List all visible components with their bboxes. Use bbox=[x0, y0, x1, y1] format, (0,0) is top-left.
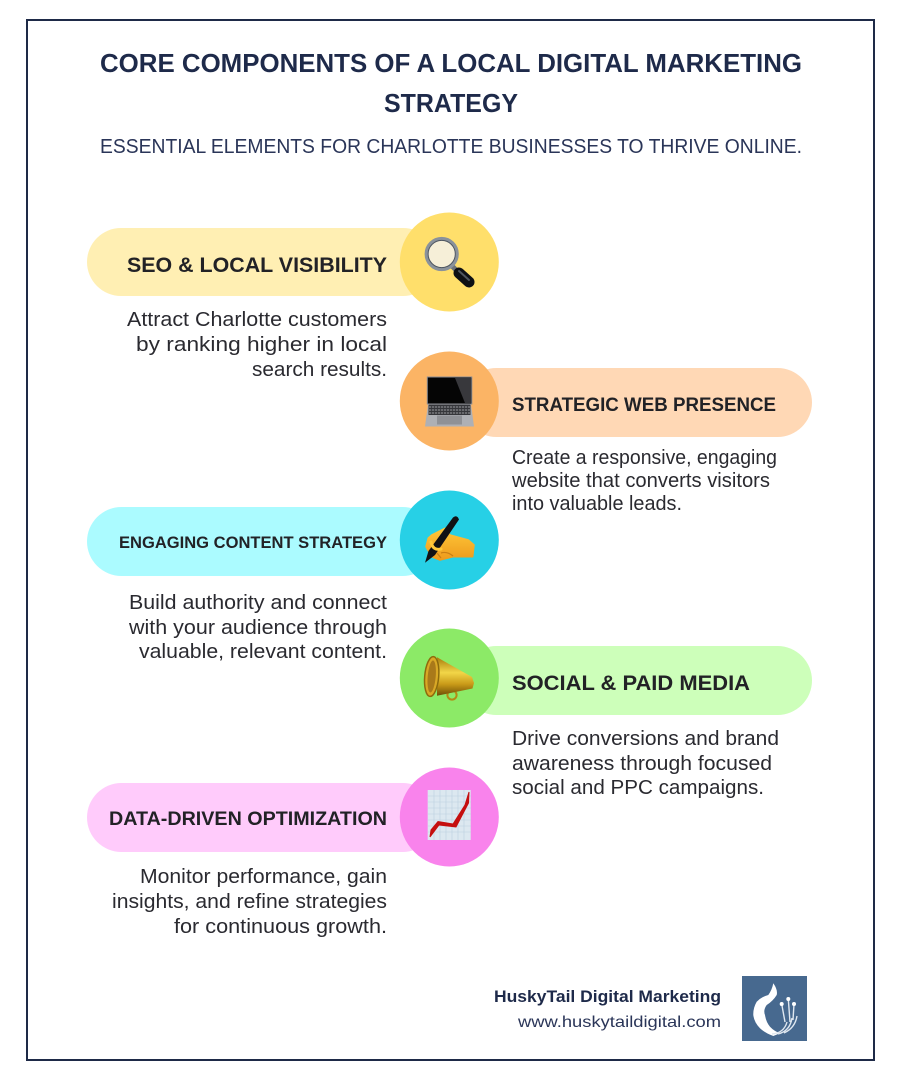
icon: writing hand bbox=[425, 516, 474, 563]
text block: web: into valuable leads. bbox=[512, 493, 682, 515]
icon circle: data bbox=[400, 768, 499, 866]
heading: SEO: SEO & LOCAL VISIBILITY bbox=[127, 254, 387, 277]
text block: data: for continuous growth. bbox=[174, 916, 387, 938]
icon circle: SEO bbox=[400, 212, 499, 312]
logo bbox=[742, 976, 807, 1041]
icon circle: social bbox=[400, 628, 499, 728]
title bbox=[100, 48, 802, 118]
footer: brand name and URL: HuskyTail Digital Marketing bbox=[494, 988, 721, 1006]
text block: social: awareness through focused bbox=[512, 753, 772, 775]
label pill: content bbox=[87, 507, 437, 576]
icon: chart bbox=[428, 790, 471, 840]
text block: SEO: Attract Charlotte customers bbox=[127, 309, 387, 331]
panel: engaging content strategy bbox=[87, 490, 499, 663]
text block: SEO: search results. bbox=[252, 359, 387, 381]
text block: SEO bbox=[127, 309, 387, 381]
heading: web: STRATEGIC WEB PRESENCE bbox=[512, 395, 776, 416]
label pill: web bbox=[462, 368, 812, 437]
icon: laptop bbox=[425, 377, 474, 426]
subtitle: ESSENTIAL ELEMENTS FOR CHARLOTTE BUSINESSES TO THRIVE ONLINE. bbox=[100, 136, 802, 158]
title: CORE COMPONENTS OF A LOCAL DIGITAL MARKETING bbox=[100, 48, 802, 78]
text block: social: social and PPC campaigns. bbox=[512, 777, 764, 799]
heading: content: ENGAGING CONTENT STRATEGY bbox=[119, 533, 388, 552]
text block: data: Monitor performance, gain bbox=[140, 866, 387, 888]
footer: brand name and URL bbox=[494, 988, 721, 1031]
text block: content: valuable, relevant content. bbox=[139, 641, 387, 663]
text block: content bbox=[128, 592, 387, 663]
panel: data-driven optimization bbox=[87, 768, 499, 938]
label pill: data bbox=[87, 783, 437, 852]
panel: social and paid media bbox=[400, 628, 812, 799]
text block: SEO: by ranking higher in local bbox=[136, 334, 387, 356]
heading: social: SOCIAL & PAID MEDIA bbox=[512, 672, 750, 695]
icon: magnifying glass bbox=[426, 238, 469, 282]
panel: strategic web presence bbox=[400, 352, 812, 515]
footer: brand name and URL: www.huskytaildigital.com bbox=[517, 1014, 721, 1031]
text block: content: with your audience through bbox=[128, 617, 387, 639]
label pill: social bbox=[462, 646, 812, 715]
icon: megaphone bbox=[423, 656, 474, 700]
text block: web: website that converts visitors bbox=[511, 470, 770, 492]
text block: data: insights, and refine strategies bbox=[112, 891, 387, 913]
label pill: SEO bbox=[87, 228, 437, 296]
panel: SEO and local visibility bbox=[87, 212, 499, 381]
text block: social bbox=[512, 728, 779, 799]
text block: content: Build authority and connect bbox=[129, 592, 387, 614]
text block: web: Create a responsive, engaging bbox=[512, 447, 777, 469]
heading: data: DATA-DRIVEN OPTIMIZATION bbox=[109, 809, 387, 830]
icon circle: web bbox=[400, 352, 499, 450]
title: STRATEGY bbox=[384, 88, 518, 118]
text block: social: Drive conversions and brand bbox=[512, 728, 779, 750]
text block: data bbox=[112, 866, 387, 938]
icon circle: content bbox=[400, 490, 499, 590]
text block: web bbox=[511, 447, 777, 515]
